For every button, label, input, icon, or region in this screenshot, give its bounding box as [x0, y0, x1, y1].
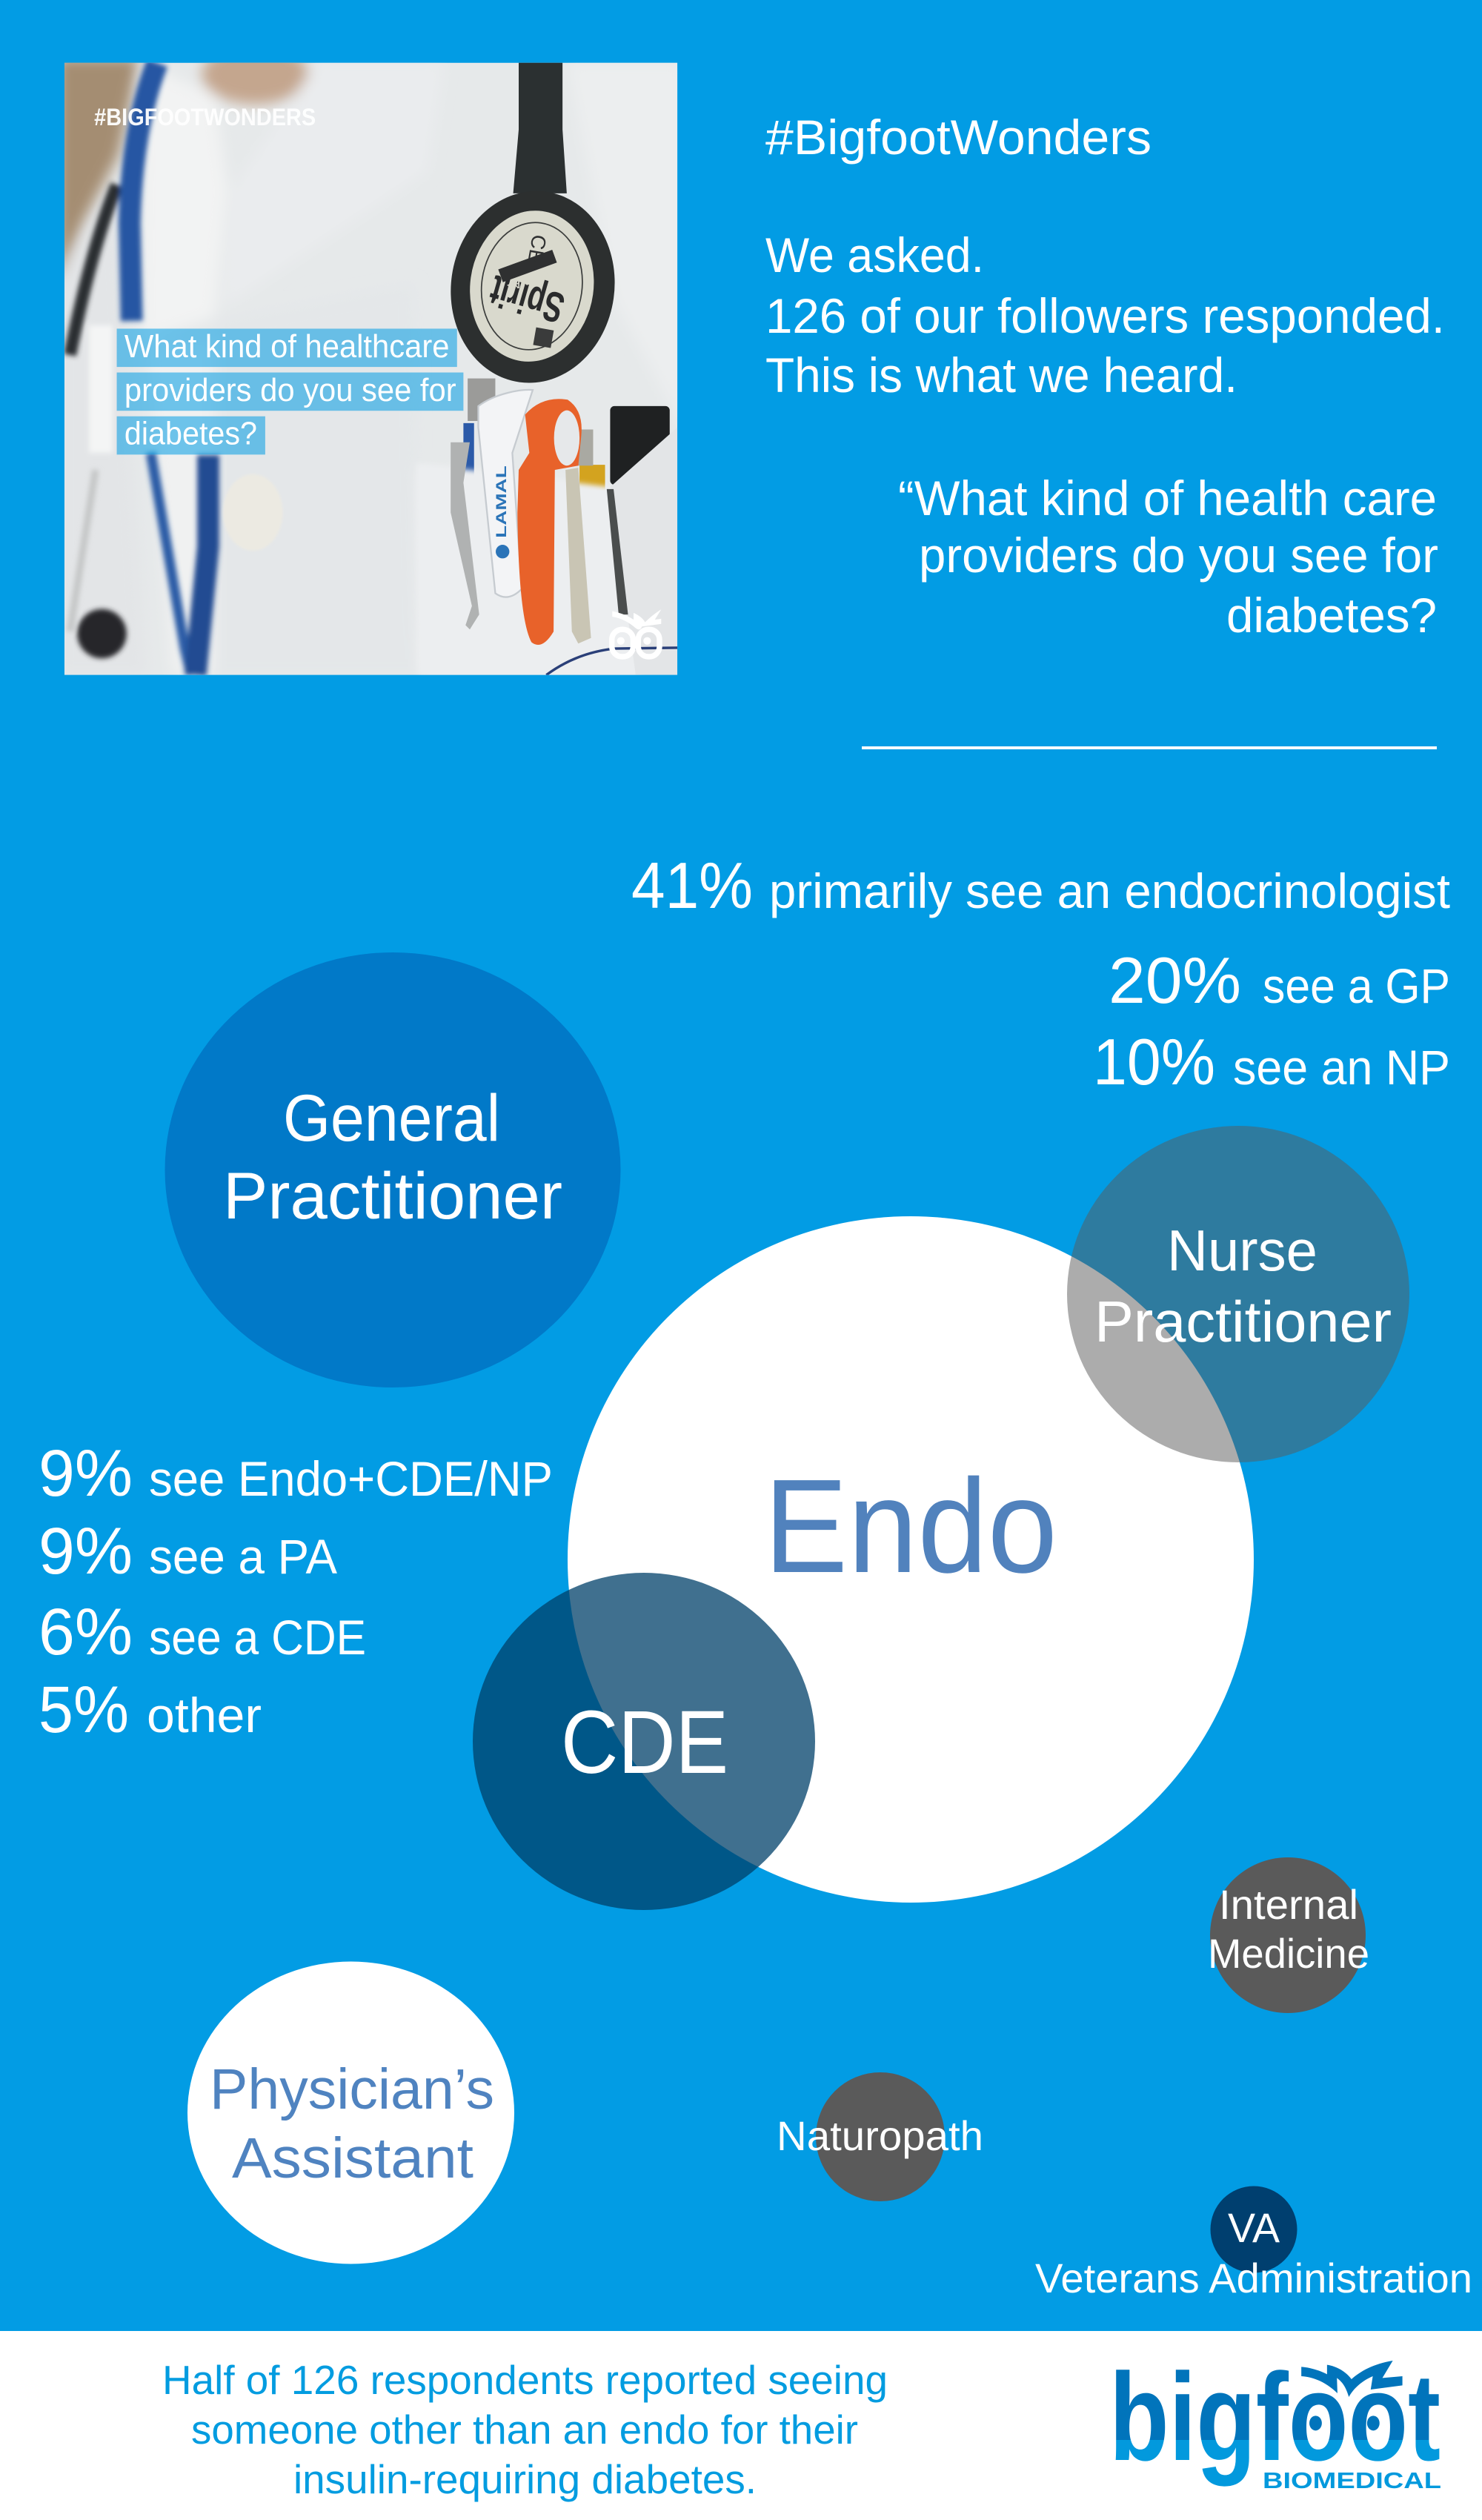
footer text — [162, 2357, 888, 2502]
circle: Endo — [568, 1216, 1254, 1903]
circle: General Practitioner — [165, 952, 621, 1387]
circle: Physician's Assistant: Assistant — [232, 2126, 473, 2190]
footer text: Half of 126 respondents reported seeing — [162, 2357, 888, 2403]
intro heading and text — [765, 110, 1445, 402]
stat: 20% GP: see a GP — [1263, 958, 1450, 1013]
photo question with highlight bars: diabetes? — [124, 417, 257, 452]
text block: we asked: We asked. — [765, 228, 984, 282]
circle: Naturopath: Naturopath — [777, 2112, 983, 2159]
stats: right — [631, 849, 1450, 1098]
circle: Nurse Practitioner — [1067, 1126, 1409, 1462]
stat: 41% endocrinologist: primarily see an endocrinologist — [769, 863, 1450, 918]
text block: we asked: This is what we heard. — [765, 348, 1237, 402]
stethoscope: Spirit — [485, 265, 569, 332]
stethoscope: ORIGINAL — [506, 266, 557, 294]
stat: 10% NP: 10% — [1093, 1025, 1215, 1098]
photo overlay label: #BIGFOOTWONDERS — [94, 104, 316, 130]
stat: 5% other: other — [147, 1688, 262, 1743]
circle: Internal Medicine: Internal — [1219, 1881, 1358, 1928]
stat: 6% CDE: see a CDE — [149, 1610, 366, 1665]
photo question with highlight bars: providers do you see for — [124, 373, 456, 408]
stethoscope — [439, 63, 627, 394]
circle: Physician's Assistant — [187, 1961, 514, 2264]
circle: Internal Medicine — [1208, 1857, 1369, 2013]
icon: bigfoot eyes logo on photo — [612, 609, 661, 657]
circle: CDE — [473, 1573, 815, 1910]
photo question with highlight bars — [117, 328, 463, 454]
text block: we asked — [765, 228, 1445, 402]
circle: General Practitioner: Practitioner — [223, 1158, 562, 1233]
question quote — [898, 471, 1438, 643]
circle: Internal Medicine: Medicine — [1208, 1930, 1369, 1977]
stat: 41% endocrinologist: 41% — [631, 849, 753, 922]
stats: left — [39, 1436, 553, 1746]
stat: 9% Endo+CDE/NP: 9% — [39, 1436, 133, 1510]
stat: 20% GP: 20% — [1109, 944, 1241, 1017]
stethoscope: CE — [523, 233, 551, 265]
stat: 9% Endo+CDE/NP: see Endo+CDE/NP — [149, 1451, 553, 1506]
question quote: “What kind of health care — [898, 471, 1437, 525]
stat: 9% PA — [39, 1513, 337, 1588]
circle: VA: VA — [1228, 2204, 1280, 2251]
heading: #BigfootWonders — [765, 110, 1152, 165]
stat: 41% endocrinologist — [631, 849, 1450, 922]
stat: 5% other: 5% — [39, 1672, 129, 1746]
stat: 6% CDE: 6% — [39, 1594, 133, 1668]
footer panel — [0, 2331, 1482, 2520]
pens in pocket: LAMAL — [494, 465, 510, 538]
coat button — [222, 507, 225, 519]
stat: 9% PA: see a PA — [149, 1529, 337, 1584]
circle: Nurse Practitioner: Practitioner — [1094, 1289, 1392, 1354]
circle: VA — [1035, 2186, 1472, 2301]
stat: 10% NP: see an NP — [1233, 1040, 1450, 1095]
stat: 9% PA: 9% — [39, 1513, 133, 1588]
photo question with highlight bars: What kind of healthcare — [124, 329, 449, 365]
circle: CDE: CDE — [561, 1691, 728, 1792]
stat: 9% Endo+CDE/NP — [39, 1436, 553, 1510]
circle: Physician's Assistant: Physician’s — [210, 2058, 494, 2121]
question quote: providers do you see for — [919, 528, 1438, 583]
stat: 5% other — [39, 1672, 262, 1746]
photo: doctor's white coat with stethoscope — [57, 44, 682, 675]
stat: 20% GP — [1109, 944, 1450, 1017]
circle: Naturopath — [777, 2072, 983, 2201]
circle: General Practitioner: General — [283, 1081, 500, 1155]
question quote: diabetes? — [1226, 588, 1437, 643]
circle: Nurse Practitioner: Nurse — [1167, 1218, 1317, 1283]
circle: VA: Veterans Administration — [1035, 2255, 1472, 2301]
stat: 10% NP — [1093, 1025, 1450, 1098]
pens in pocket — [416, 379, 677, 675]
stat: 6% CDE — [39, 1594, 366, 1668]
logo: bigfoot biomedical: BIOMEDICAL — [1263, 2467, 1441, 2493]
footer text: insulin-requiring diabetes. — [293, 2456, 757, 2502]
text block: we asked: 126 of our followers responded. — [765, 288, 1445, 343]
footer text: someone other than an endo for their — [191, 2407, 858, 2453]
circle: Endo: Endo — [764, 1452, 1057, 1601]
